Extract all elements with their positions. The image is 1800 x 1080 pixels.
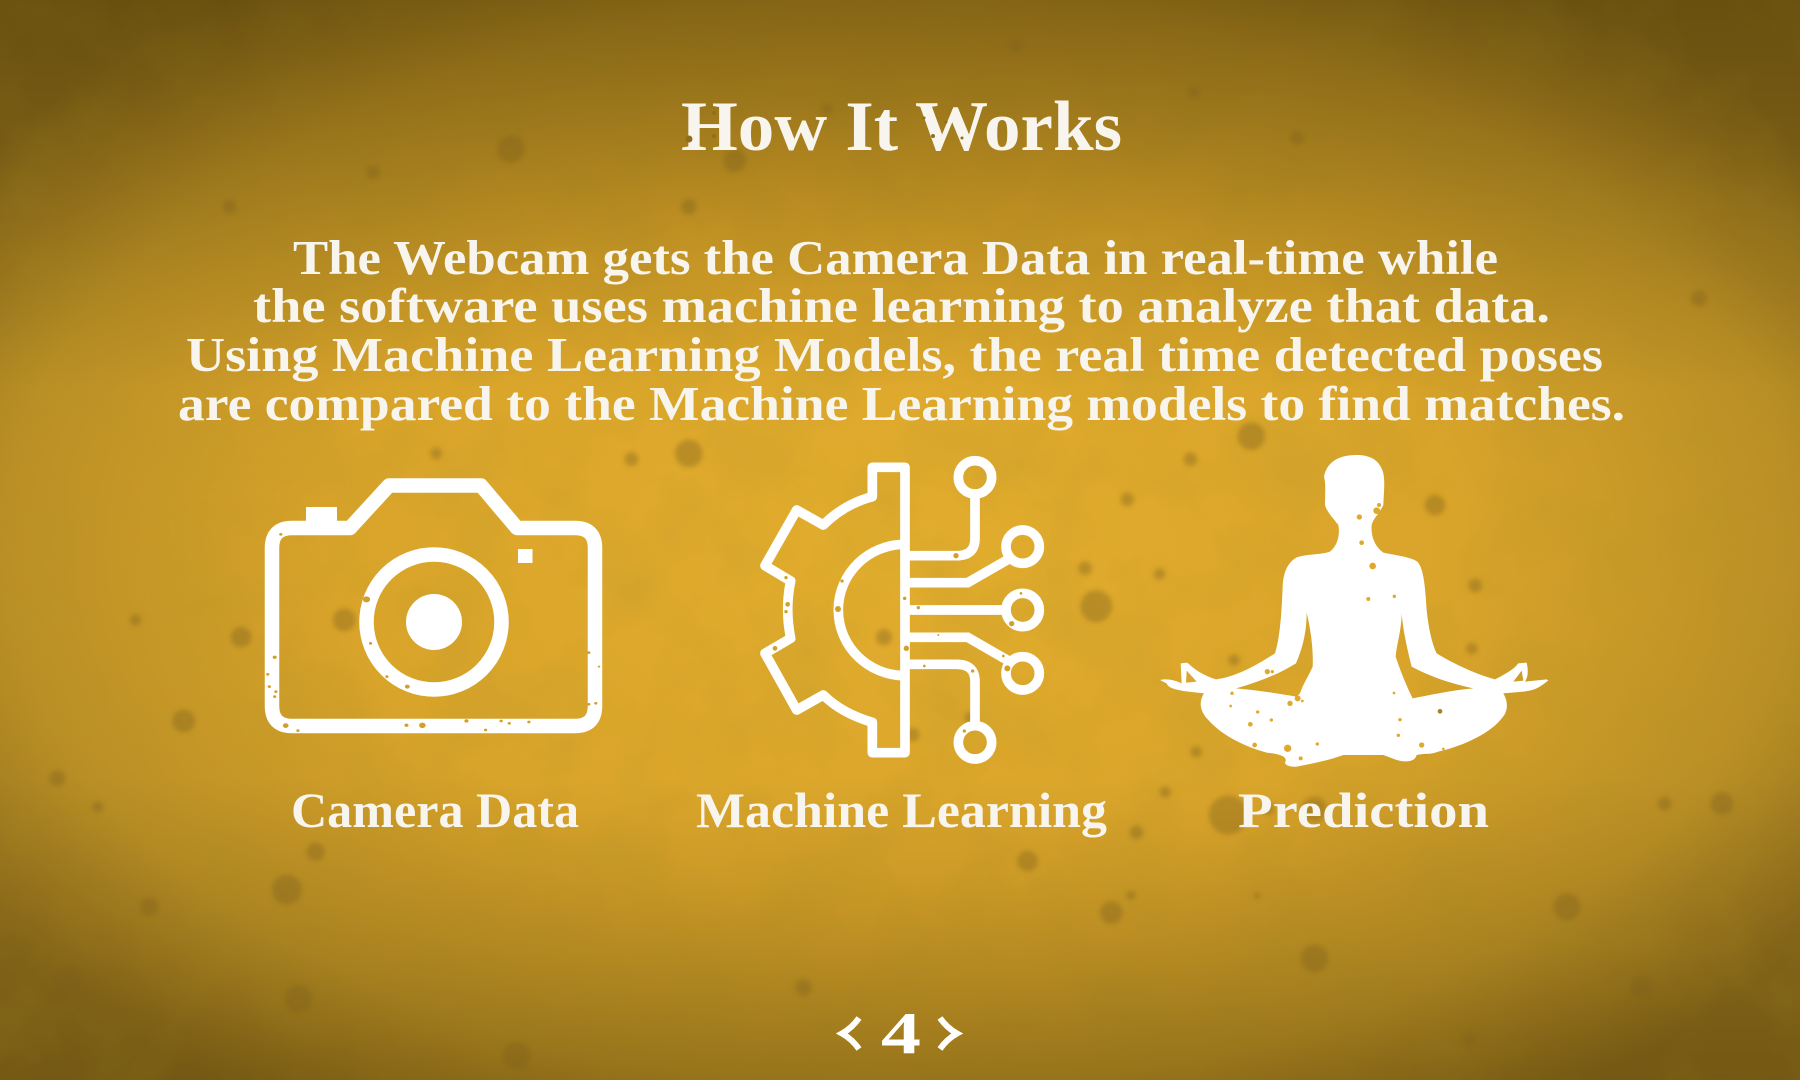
icon: meditating figure	[1160, 455, 1548, 767]
page number: 4	[881, 1000, 921, 1066]
arrow: previous	[842, 1018, 859, 1049]
lens pupil	[406, 594, 462, 650]
icon: camera	[266, 486, 600, 732]
body text: The Webcam gets the Camera Data in real-time while	[293, 230, 1498, 285]
body text	[178, 230, 1625, 431]
circuit traces and nodes	[905, 461, 1039, 759]
title: How It Works	[681, 88, 1122, 166]
arrow: next	[940, 1018, 957, 1049]
label: Camera Data: Camera Data	[291, 782, 579, 838]
half circle core	[838, 544, 905, 676]
lens ring	[366, 554, 502, 690]
camera flash	[306, 507, 337, 523]
camera body outline	[272, 486, 595, 726]
silhouette	[1160, 455, 1548, 767]
body text: are compared to the Machine Learning models to find matches.	[178, 376, 1625, 431]
half gear	[765, 467, 905, 753]
body text: Using Machine Learning Models, the real time detected poses	[186, 327, 1603, 382]
body text: the software uses machine learning to analyze that data.	[253, 278, 1550, 333]
icon: machine learning gear and circuit	[765, 461, 1039, 759]
viewfinder square	[518, 549, 532, 563]
label: Machine Learning: Machine Learning	[696, 782, 1107, 838]
label: Prediction: Prediction	[1238, 782, 1489, 838]
pagination	[842, 1000, 957, 1066]
